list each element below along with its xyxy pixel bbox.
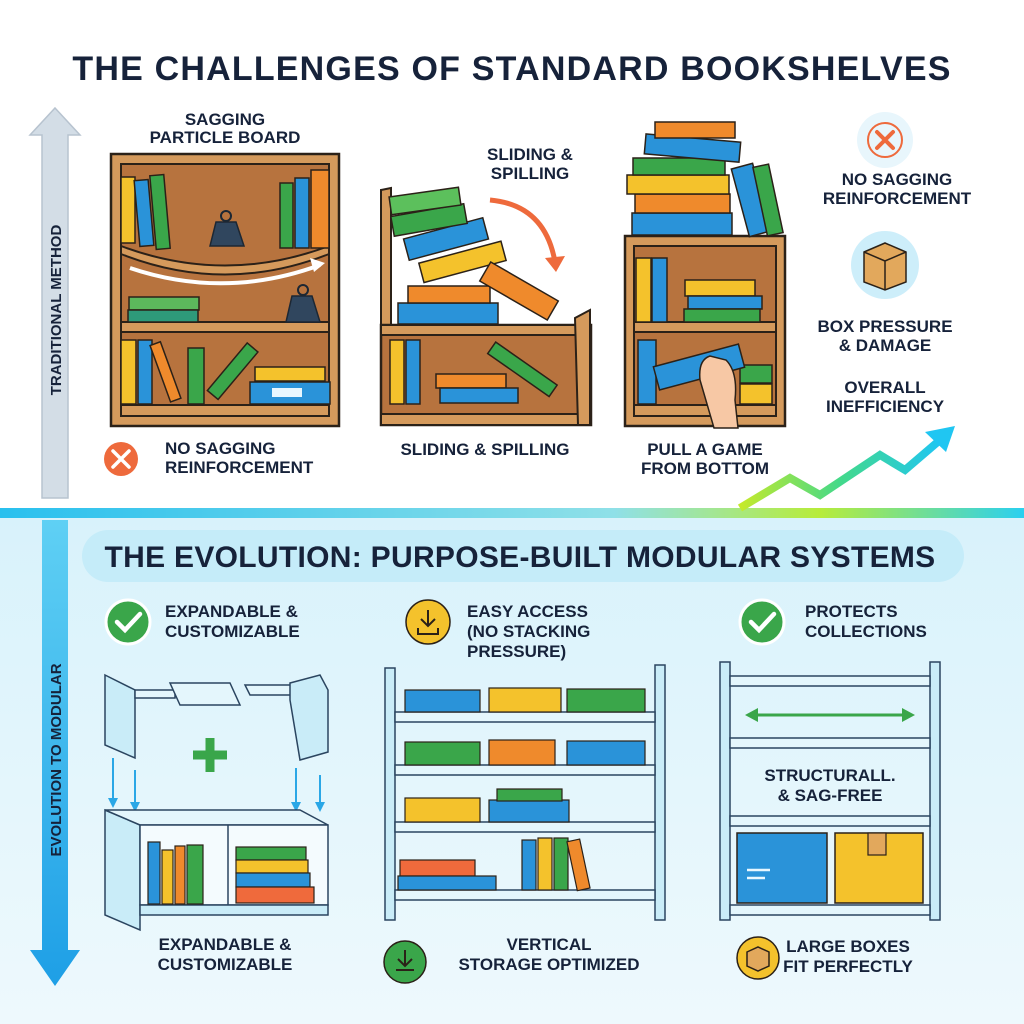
panel: easy access: PRESSURE)	[467, 642, 566, 661]
panel: protects collections: FIT PERFECTLY	[783, 957, 914, 976]
panel: sliding and spilling	[381, 145, 591, 459]
arrow: trending up	[740, 426, 955, 508]
panel: protects collections: LARGE BOXES	[786, 937, 910, 956]
panel: expandable: CUSTOMIZABLE	[158, 955, 292, 974]
panel: sliding and spilling: SLIDING &	[487, 145, 573, 164]
panel: easy access	[384, 600, 665, 983]
panel: sagging particle board: SAGGING	[185, 110, 265, 129]
gradient band divider	[0, 508, 1024, 518]
panel: pull a game from bottom: PULL A GAME	[647, 440, 763, 459]
callout: no sagging reinforcement (left)	[104, 439, 314, 477]
panel: protects collections: PROTECTS	[805, 602, 898, 621]
title: THE CHALLENGES OF STANDARD BOOKSHELVES	[72, 50, 952, 88]
right column callouts: BOX PRESSURE	[817, 317, 953, 336]
arrow: evolution to modular: EVOLUTION TO MODULAR	[48, 663, 65, 857]
right column callouts: REINFORCEMENT	[823, 189, 972, 208]
right column callouts: NO SAGGING	[842, 170, 952, 189]
panel: expandable: CUSTOMIZABLE	[165, 622, 300, 641]
arrow: evolution to modular	[30, 520, 80, 986]
right column callouts: INEFFICIENCY	[826, 397, 945, 416]
right column callouts: & DAMAGE	[839, 336, 931, 355]
heading pill: evolution: THE EVOLUTION: PURPOSE-BUILT MODULAR SYSTEMS	[104, 541, 936, 574]
callout: no sagging reinforcement (left): REINFORCEMENT	[165, 458, 314, 477]
panel: pull a game from bottom	[625, 122, 785, 478]
panel: expandable: EXPANDABLE &	[165, 602, 298, 621]
panel: protects collections	[720, 600, 940, 979]
icon: damaged box	[851, 231, 919, 299]
panel: protects collections: COLLECTIONS	[805, 622, 927, 641]
panel: expandable	[105, 600, 328, 974]
panel: expandable: EXPANDABLE &	[159, 935, 291, 954]
panel: protects collections: & SAG-FREE	[778, 786, 882, 805]
icon: red x	[857, 112, 913, 168]
panel: sliding and spilling: SPILLING	[491, 164, 569, 183]
right column callouts	[817, 112, 972, 416]
arrow: traditional method: TRADITIONAL METHOD	[48, 225, 65, 395]
panel: easy access: VERTICAL	[506, 935, 592, 954]
arrow: traditional method	[30, 108, 80, 498]
panel: easy access: (NO STACKING	[467, 622, 590, 641]
panel: pull a game from bottom: FROM BOTTOM	[641, 459, 769, 478]
panel: easy access: EASY ACCESS	[467, 602, 588, 621]
panel: easy access: STORAGE OPTIMIZED	[458, 955, 640, 974]
right column callouts: OVERALL	[844, 378, 926, 397]
callout: no sagging reinforcement (left): NO SAGGING	[165, 439, 276, 458]
heading pill: evolution	[82, 530, 964, 582]
bottom background	[0, 512, 1024, 1024]
panel: sagging particle board: PARTICLE BOARD	[150, 128, 300, 147]
panel: sagging particle board	[111, 110, 339, 426]
panel: protects collections: STRUCTURALL.	[764, 766, 896, 785]
panel: sliding and spilling: SLIDING & SPILLING	[400, 440, 570, 459]
